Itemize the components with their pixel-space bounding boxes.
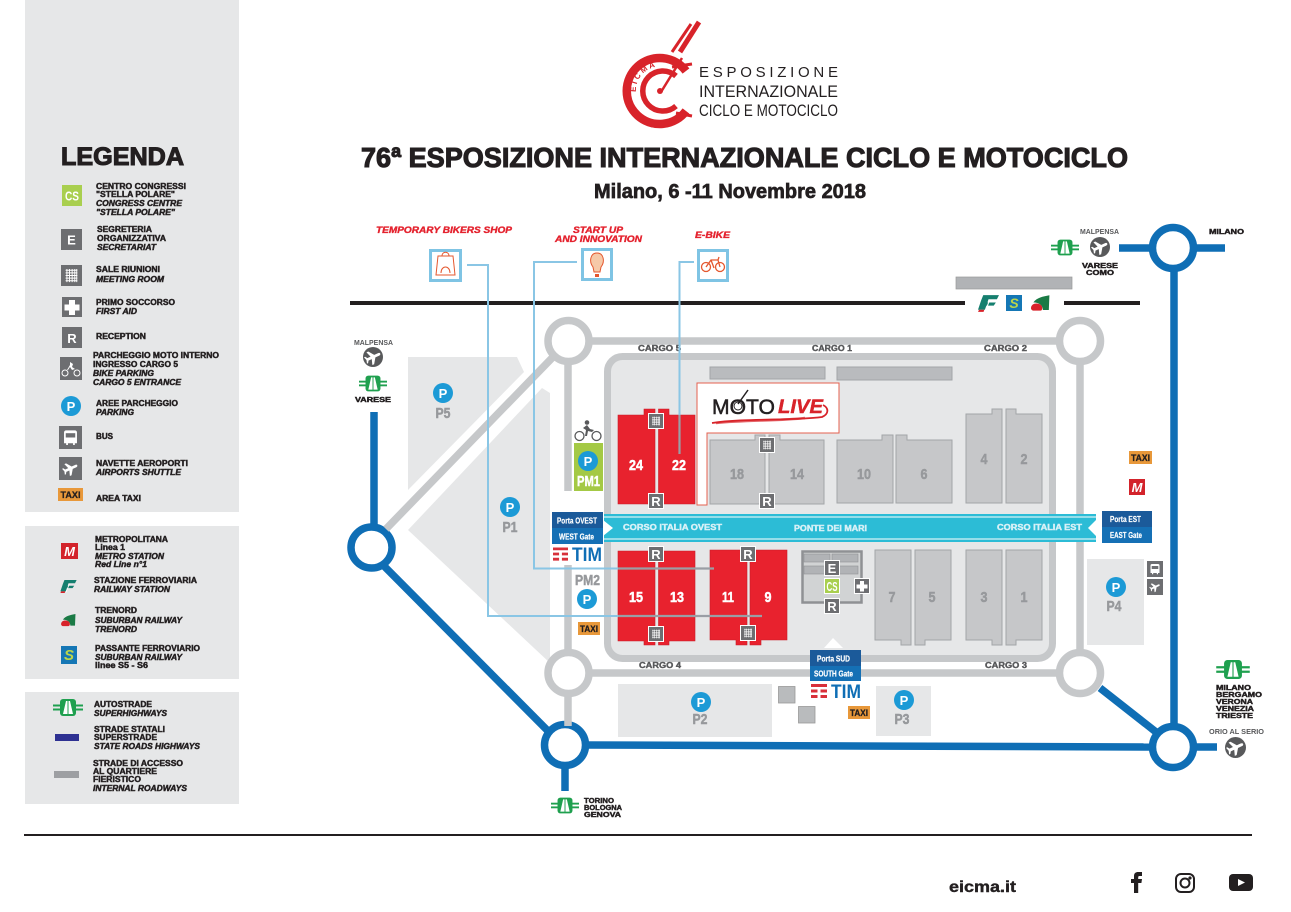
bus and shuttle markers east	[1147, 561, 1163, 595]
legend item: bike parking: PARCHEGGIO MOTO INTERNO	[93, 351, 219, 360]
top feature: e-bike: E-BIKE	[695, 230, 731, 240]
legend item: bus: BUS	[96, 432, 114, 441]
meeting room and reception markers: R	[651, 494, 661, 509]
light-blue connector lines	[467, 262, 762, 616]
legend item: trenord: TRENORD	[95, 625, 137, 634]
red halls 24 and 22	[618, 409, 695, 504]
legend item: internal roadways: INTERNAL ROADWAYS	[93, 784, 188, 793]
footer rule	[24, 834, 1252, 836]
grey north hall numbers: 14	[790, 466, 805, 483]
legend item: superhighways: AUTOSTRADE	[94, 700, 153, 709]
direction: Milano: MILANO	[1209, 229, 1245, 236]
legend item: first aid	[62, 297, 175, 317]
direction: Milano Bergamo Verona Venezia Trieste: TRIESTE	[1216, 713, 1253, 720]
legend item: airport shuttle: AIRPORTS SHUTTLE	[95, 468, 182, 477]
metro marker east	[1129, 479, 1145, 495]
parking marker P2: P2	[692, 711, 708, 728]
legend item: meeting room: SALE RIUNIONI	[96, 265, 160, 274]
top feature: e-bike	[695, 230, 731, 280]
meeting room and reception markers: R	[762, 494, 772, 509]
legend item: secretariat: E	[67, 232, 76, 248]
legend item: suburban railway: PASSANTE FERROVIARIO	[95, 644, 200, 653]
direction: Torino Bologna Genova	[551, 798, 622, 819]
cargo labels: CARGO 2	[984, 344, 1028, 353]
bike parking PM1	[574, 420, 603, 491]
grey north hall numbers: 18	[730, 466, 744, 483]
legend item: meeting room	[61, 265, 164, 286]
grey access roads	[386, 320, 1100, 726]
direction: Milano Bergamo Verona Venezia Trieste: VENEZIA	[1216, 706, 1254, 713]
grey north hall numbers: 4	[980, 451, 988, 468]
grey north hall numbers	[730, 451, 1028, 483]
legend item: airport shuttle: NAVETTE AEROPORTI	[96, 459, 188, 468]
cargo labels: CARGO 3	[985, 661, 1028, 670]
red halls 15 and 13: 13	[670, 589, 684, 606]
legend panel: roads	[25, 692, 239, 804]
red halls 11 and 9	[710, 550, 787, 645]
legend item: metro: METROPOLITANA	[95, 535, 168, 544]
parking PM2: PM2	[575, 572, 600, 589]
legend item: trenord: TRENORD	[95, 606, 137, 615]
legend item: state roads: STRADE STATALI	[94, 725, 165, 734]
east gate: Porta EST	[1110, 514, 1142, 524]
MotoLive logo: MOTO	[712, 396, 775, 419]
legend item: superhighways: SUPERHIGHWAYS	[94, 709, 168, 718]
congress centre markers: E	[828, 561, 837, 576]
legend item: internal roadways	[54, 759, 188, 793]
legend item: metro: M	[64, 544, 76, 559]
legend item: metro: Red Line n°1	[95, 560, 148, 569]
parking marker P1: P1	[502, 519, 518, 536]
legend item: reception: RECEPTION	[96, 332, 146, 341]
west gate with TIM logo: TIM	[572, 545, 602, 566]
legend item: trenord	[61, 606, 183, 634]
metro marker east: M	[1132, 480, 1144, 495]
Ponte dei Mari teal band: PONTE DEI MARI	[794, 524, 867, 533]
icon: instagram	[1176, 874, 1194, 892]
legend item: meeting room: MEETING ROOM	[96, 275, 164, 284]
east gate	[1102, 511, 1152, 543]
legend item: secretariat: ORGANIZZATIVA	[97, 234, 166, 243]
red halls 11 and 9: 11	[722, 589, 734, 606]
grey south hall numbers: 5	[928, 589, 936, 606]
legend item: first aid: FIRST AID	[96, 307, 137, 316]
legend item: bike parking	[60, 351, 219, 387]
legend item: reception	[62, 327, 146, 348]
parking marker P3	[894, 690, 914, 728]
direction: Torino Bologna Genova: BOLOGNA	[584, 805, 622, 812]
legend item: internal roadways: AL QUARTIERE	[93, 767, 158, 776]
cargo labels	[638, 344, 1028, 670]
legend item: superhighways	[53, 699, 168, 718]
legend item: taxi: AREA TAXI	[96, 494, 141, 503]
legend item: bike parking: INGRESSO CARGO 5	[93, 360, 179, 369]
parking marker P5	[433, 383, 453, 422]
legend item: state roads: SUPERSTRADE	[94, 733, 158, 742]
railway line	[350, 301, 1140, 305]
south gate with TIM logo	[810, 638, 861, 703]
bike parking PM1: PM1	[577, 473, 600, 490]
legend item: internal roadways: FIERISTICO	[93, 775, 141, 784]
direction: Milano Bergamo Verona Venezia Trieste	[1216, 660, 1263, 720]
taxi marker east: TAXI	[1131, 453, 1150, 463]
south gate with TIM logo: TIM	[831, 682, 861, 703]
legend item: congress centre: CS	[65, 188, 79, 204]
meeting room and reception markers	[648, 413, 775, 642]
railway icons: S	[1009, 295, 1019, 311]
legend item: railway station	[60, 576, 197, 594]
bike parking PM1: P	[584, 454, 593, 469]
grey service squares	[778, 686, 815, 723]
top feature: start up and innovation: AND INNOVATION	[554, 234, 643, 244]
direction: Malpensa Varese Como: COMO	[1086, 270, 1115, 277]
legend item: bike parking: CARGO 5 ENTRANCE	[93, 378, 182, 387]
legend item: parking	[61, 396, 178, 417]
legend item: first aid: PRIMO SOCCORSO	[96, 298, 175, 307]
parking marker P4: P4	[1106, 598, 1122, 615]
direction: Malpensa Varese Como: VARESE	[1082, 263, 1118, 270]
cargo labels: CARGO 5	[638, 344, 682, 353]
parking PM2	[575, 572, 600, 609]
icon: youtube	[1229, 874, 1253, 891]
taxi marker south: TAXI	[850, 708, 868, 718]
top feature: temporary bikers shop: TEMPORARY BIKERS SHOP	[376, 225, 513, 235]
icon: facebook	[1131, 872, 1142, 893]
logo mark	[627, 22, 699, 124]
legend panel: services	[25, 0, 239, 512]
subtitle: Milano, 6 -11 Novembre 2018	[594, 181, 866, 203]
red halls 15 and 13	[618, 551, 695, 645]
parking marker P2	[691, 692, 711, 728]
grey south hall numbers: 1	[1020, 589, 1028, 606]
grey south halls	[875, 550, 1042, 645]
red halls 11 and 9: 9	[764, 589, 772, 606]
legend item: congress centre: CENTRO CONGRESSI	[96, 182, 186, 191]
parking marker P5: P	[439, 386, 448, 401]
legend item: metro	[61, 535, 168, 569]
direction: Torino Bologna Genova: GENOVA	[584, 812, 621, 819]
parking marker P1: P	[506, 500, 515, 515]
direction: Orio al Serio	[1209, 727, 1264, 758]
taxi marker east	[1129, 451, 1152, 464]
legend item: secretariat: SEGRETERIA	[97, 225, 152, 234]
taxi marker west: TAXI	[580, 624, 598, 634]
parking marker P3: P	[900, 693, 909, 708]
congress centre markers: CS	[826, 579, 838, 594]
congress centre markers: R	[827, 599, 837, 614]
grey south hall numbers	[888, 589, 1028, 606]
legend heading: LEGENDA	[61, 143, 184, 171]
legend item: reception: R	[67, 331, 77, 346]
logo wordmark	[699, 64, 838, 120]
parking marker P4	[1106, 577, 1126, 615]
logo wordmark: INTERNAZIONALE	[699, 82, 838, 101]
direction: Malpensa Varese Como	[1051, 227, 1120, 277]
legend item: secretariat: SECRETARIAT	[97, 243, 157, 252]
legend item: bus	[59, 426, 114, 449]
cargo labels: CARGO 4	[639, 661, 682, 670]
east gate: EAST Gate	[1110, 530, 1142, 540]
direction: Milano Bergamo Verona Venezia Trieste: VERONA	[1216, 699, 1253, 706]
legend item: suburban railway	[61, 644, 200, 670]
legend panel: rail transport	[25, 526, 239, 679]
legend item: congress centre	[62, 182, 186, 217]
legend item: taxi: TAXI	[60, 490, 80, 500]
Ponte dei Mari teal band: CORSO ITALIA EST	[997, 523, 1082, 532]
legend item: trenord: SUBURBAN RAILWAY	[95, 616, 183, 625]
top feature: start up and innovation: START UP	[573, 225, 624, 235]
direction: Torino Bologna Genova: TORINO	[584, 798, 615, 805]
direction: Milano Bergamo Verona Venezia Trieste: BERGAMO	[1216, 692, 1263, 699]
railway icons	[978, 295, 1049, 312]
legend item: state roads	[55, 725, 201, 751]
legend item: airport shuttle	[59, 457, 188, 480]
south gate with TIM logo: SOUTH Gate	[814, 668, 853, 678]
fairground block with grey perimeter	[608, 356, 1052, 658]
Ponte dei Mari teal band	[603, 514, 1096, 542]
parking marker P4: P	[1112, 580, 1121, 595]
legend item: internal roadways: STRADE DI ACCESSO	[93, 759, 183, 768]
legend item: parking: P	[67, 399, 76, 414]
cargo labels: CARGO 1	[812, 344, 853, 353]
legend item: suburban railway: S	[64, 647, 74, 664]
legend item: metro: Linea 1	[95, 543, 126, 552]
west gate with TIM logo: WEST Gate	[559, 532, 594, 542]
legend item: metro: METRO STATION	[95, 552, 164, 561]
legend item: suburban railway: linee S5 - S6	[95, 661, 149, 670]
meeting room and reception markers: R	[743, 547, 753, 562]
taxi marker south	[848, 706, 870, 719]
EICMA logo	[622, 20, 838, 128]
MotoLive logo	[712, 390, 827, 423]
top feature: temporary bikers shop	[376, 225, 513, 280]
direction: Milano Bergamo Verona Venezia Trieste: MILANO	[1216, 685, 1252, 692]
legend item: bike parking: BIKE PARKING	[93, 369, 154, 378]
red halls 24 and 22: 24	[629, 457, 644, 474]
congress centre markers	[824, 560, 870, 614]
grey south hall numbers: 3	[980, 589, 988, 606]
grey south hall numbers: 7	[888, 589, 896, 606]
MotoLive box	[697, 383, 839, 505]
parking marker P2: P	[697, 695, 706, 710]
MotoLive logo: LIVE	[778, 397, 824, 418]
logo wordmark: ESPOSIZIONE	[699, 64, 838, 81]
grey north hall numbers: 6	[920, 466, 928, 483]
direction: Malpensa Varese west: VARESE	[355, 397, 391, 404]
parking marker P3: P3	[894, 711, 910, 728]
top feature: start up and innovation	[554, 225, 643, 280]
legend item: congress centre: "STELLA POLARE"	[96, 190, 175, 199]
railway depot rectangle	[956, 277, 1072, 289]
logo arc letters: E I C M A	[631, 63, 655, 92]
west gate with TIM logo	[552, 512, 603, 566]
parking areas background	[408, 357, 1144, 737]
south gate with TIM logo: Porta SUD	[817, 654, 850, 664]
footer website: eicma.it	[949, 879, 1017, 896]
legend item: parking: PARKING	[96, 408, 134, 417]
red halls 15 and 13: 15	[629, 589, 643, 606]
meeting room and reception markers: R	[651, 547, 661, 562]
direction: Orio al Serio: ORIO AL SERIO	[1209, 727, 1264, 736]
legend item: congress centre: CONGRESS CENTRE	[96, 199, 183, 208]
main title: 76ª ESPOSIZIONE INTERNAZIONALE CICLO E MOTOCICLO	[361, 142, 1128, 173]
blue motorway ring	[351, 228, 1225, 791]
legend item: suburban railway: SUBURBAN RAILWAY	[95, 653, 183, 662]
grey north halls	[710, 409, 1042, 504]
top service buildings	[710, 367, 952, 380]
direction: Malpensa Varese Como: MALPENSA	[1080, 227, 1120, 236]
Ponte dei Mari teal band: CORSO ITALIA OVEST	[623, 523, 722, 532]
direction: Malpensa Varese west	[354, 338, 394, 404]
grey north hall numbers: 2	[1020, 451, 1028, 468]
legend item: state roads: STATE ROADS HIGHWAYS	[94, 742, 201, 751]
west gate with TIM logo: Porta OVEST	[557, 516, 598, 526]
parking marker P1	[500, 497, 520, 536]
legend item: congress centre: "STELLA POLARE"	[96, 208, 175, 217]
taxi marker west	[578, 622, 600, 635]
congress centre building	[802, 552, 862, 602]
legend item: railway station: RAILWAY STATION	[94, 585, 170, 594]
legend item: secretariat	[61, 225, 166, 252]
direction: Malpensa Varese west: MALPENSA	[354, 338, 394, 347]
grey north hall numbers: 10	[857, 466, 871, 483]
legend item: railway station: STAZIONE FERROVIARIA	[94, 576, 197, 585]
legend item: taxi	[58, 488, 141, 503]
red halls 24 and 22: 22	[672, 457, 686, 474]
parking marker P5: P5	[436, 405, 450, 422]
parking PM2: P	[583, 592, 592, 607]
logo wordmark: CICLO E MOTOCICLO	[699, 101, 838, 120]
legend item: parking: AREE PARCHEGGIO	[96, 399, 178, 408]
